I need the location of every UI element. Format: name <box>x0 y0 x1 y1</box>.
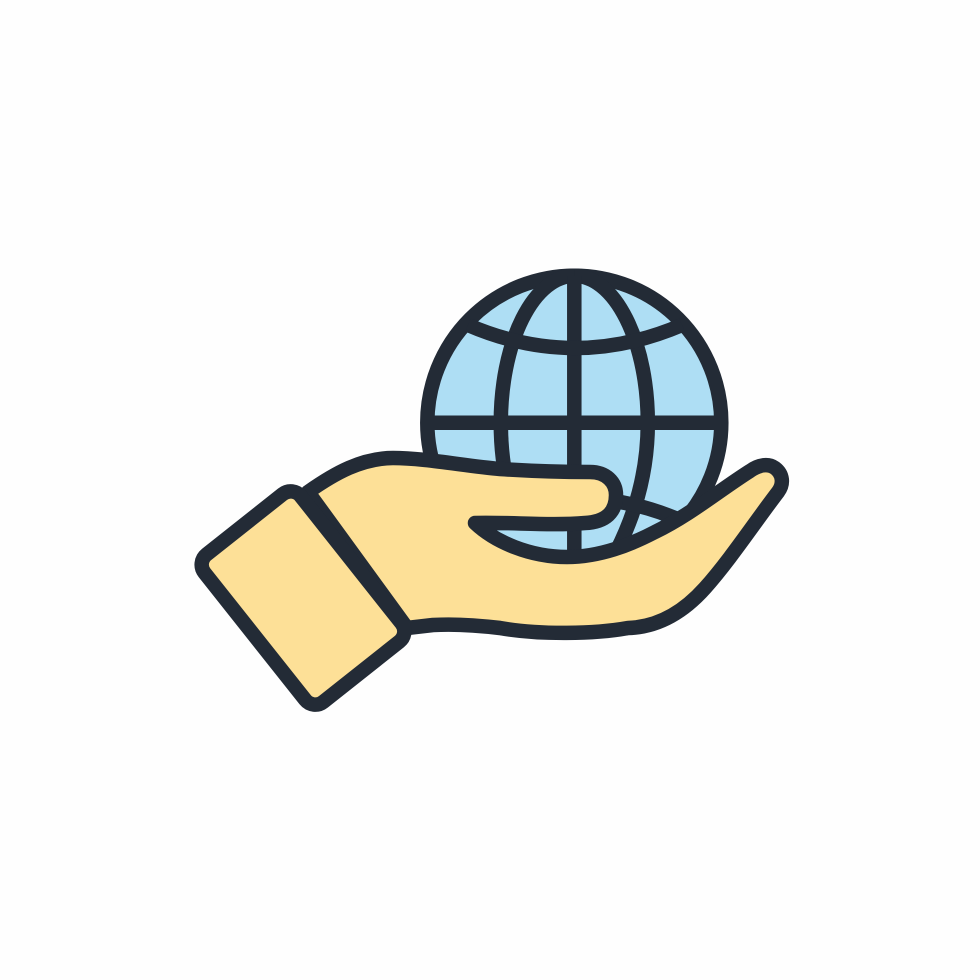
icon: cuff <box>196 486 410 710</box>
icon: globe <box>427 276 721 570</box>
icon: hand <box>308 458 782 633</box>
